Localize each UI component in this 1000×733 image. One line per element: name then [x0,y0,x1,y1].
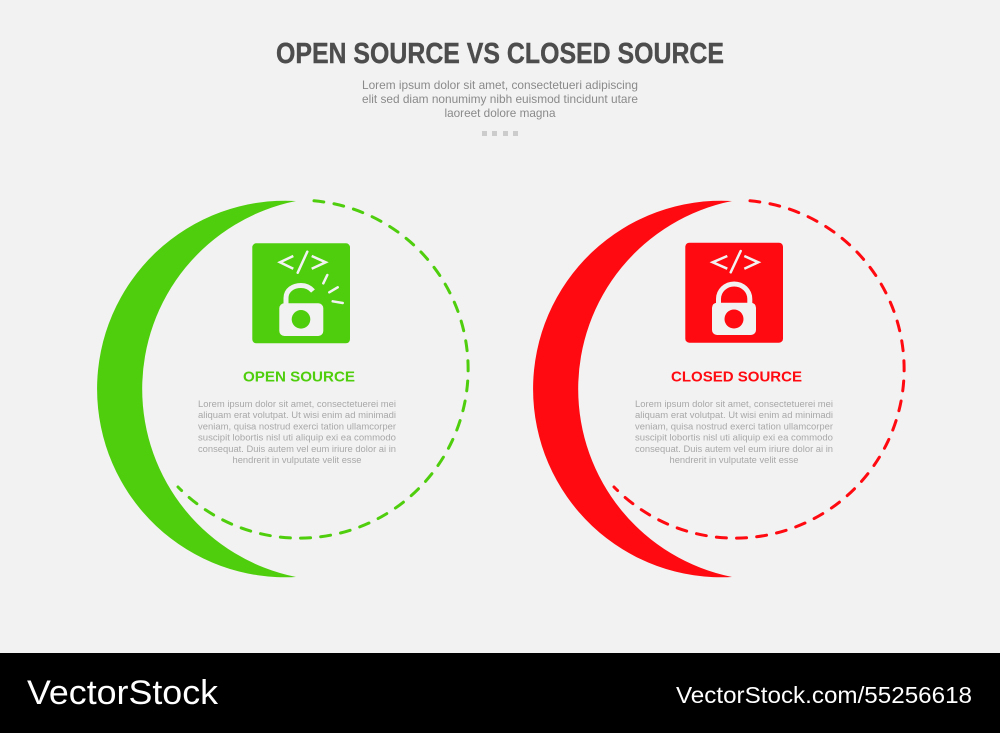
closed source body text: hendrerit in vulputate velit esse [670,455,798,465]
footer bar [0,653,1000,733]
icon: closed padlock with code symbol [685,243,783,343]
closed source body text: suscipit lobortis nisl uti aliquip exi ea commodo [635,433,833,443]
heading: open source: OPEN SOURCE [243,368,355,386]
green crescent [97,201,296,577]
open source body text: Lorem ipsum dolor sit amet, consectetuerei mei [198,399,396,409]
closed source body text: aliquam erat volutpat. Ut wisi enim ad minimadi [635,410,833,420]
closed source body text: veniam, quisa nostrud exerci tation ullamcorper [635,421,833,431]
closed source body text: Lorem ipsum dolor sit amet, consectetuerei mei [635,399,833,409]
red crescent [533,201,732,577]
green dashed circle arc [178,201,468,538]
footer image id text: VectorStock.com/55256618 [676,682,972,708]
pagination dots [482,131,518,136]
subtitle text [362,78,638,120]
closed source body text [635,399,833,465]
panel: closed source [533,201,904,577]
footer logo text: VectorStock [27,674,219,712]
panel: open source [97,201,468,577]
open source body text [198,399,396,465]
open source body text: aliquam erat volutpat. Ut wisi enim ad minimadi [198,410,396,420]
open source body text: veniam, quisa nostrud exerci tation ullamcorper [198,421,396,431]
heading: closed source: CLOSED SOURCE [671,368,802,386]
header: title, subtitle and dots [276,38,724,136]
open source body text: consequat. Duis autem vel eum iriure dolor ai in [198,444,396,454]
subtitle text: elit sed diam nonumimy nibh euismod tincidunt utare [362,92,638,106]
subtitle text: laoreet dolore magna [444,106,556,120]
red dashed circle arc [614,201,904,538]
subtitle text: Lorem ipsum dolor sit amet, consectetueri adipiscing [362,78,638,92]
closed source body text: consequat. Duis autem vel eum iriure dolor ai in [635,444,833,454]
open source body text: suscipit lobortis nisl uti aliquip exi ea commodo [198,433,396,443]
title: OPEN SOURCE VS CLOSED SOURCE [276,38,724,70]
open source body text: hendrerit in vulputate velit esse [232,455,362,465]
icon: open padlock with code symbol [252,243,350,343]
